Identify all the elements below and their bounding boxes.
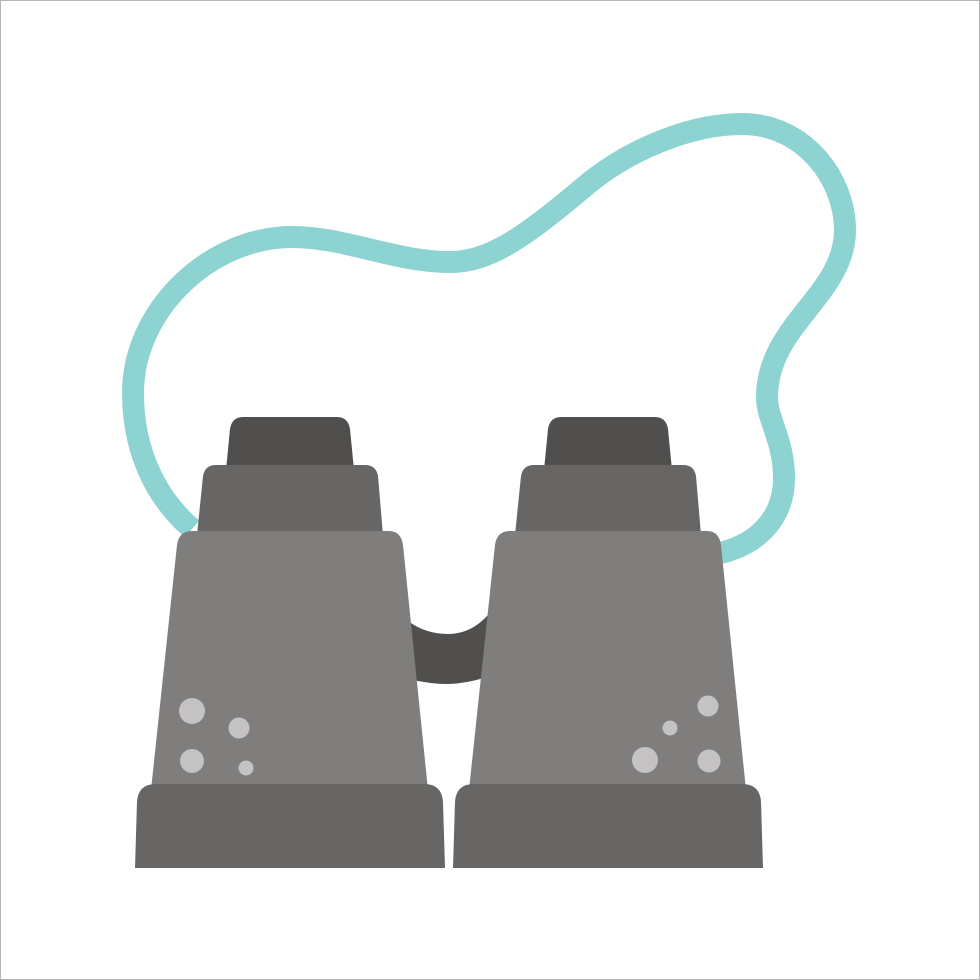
base: [453, 784, 763, 868]
dots: [632, 696, 720, 773]
eyepiece top: [226, 417, 354, 470]
eyepiece middle: [515, 465, 701, 535]
left barrel: [135, 417, 445, 868]
neck strap: [133, 124, 845, 553]
eyepiece top: [544, 417, 672, 470]
dots: [179, 698, 254, 776]
base: [135, 784, 445, 868]
bridge connecting barrels: [408, 610, 492, 684]
main body: [469, 531, 746, 790]
right barrel: [453, 417, 763, 868]
main body: [151, 531, 428, 790]
eyepiece middle: [197, 465, 383, 535]
